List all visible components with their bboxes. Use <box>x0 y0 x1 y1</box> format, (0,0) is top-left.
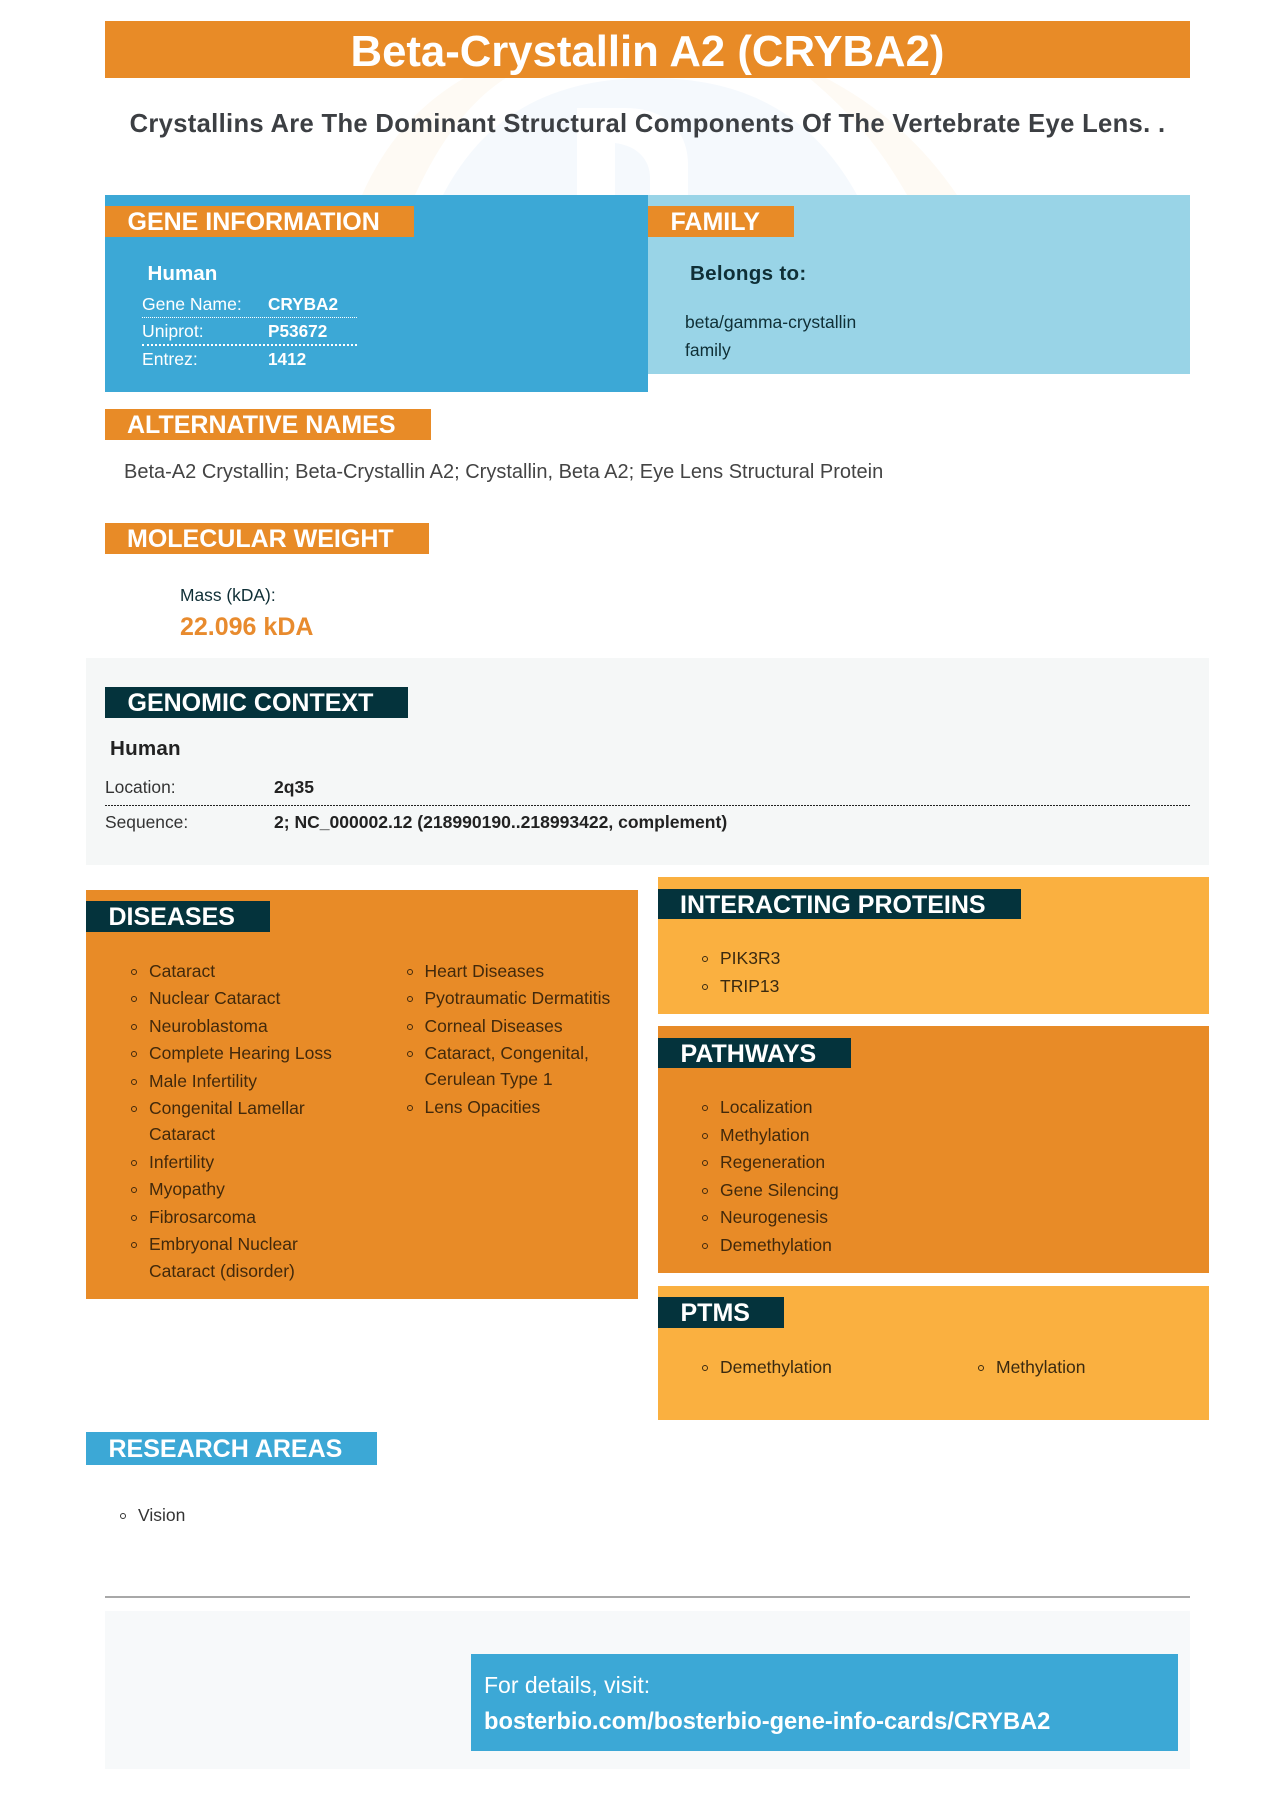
heading: genomic context: GENOMIC CONTEXT <box>128 689 373 717</box>
heading: pathways <box>658 1038 851 1068</box>
diseases list column 1: Male Infertility <box>149 1071 257 1091</box>
family name: beta/gamma-crystallin <box>685 312 856 332</box>
title bar: Beta-Crystallin A2 (CRYBA2) <box>351 27 944 76</box>
diseases list column 1: Embryonal Nuclear <box>149 1234 298 1254</box>
heading: ptms <box>658 1297 784 1328</box>
location and sequence table <box>105 777 1190 832</box>
pathways list: Localization <box>720 1097 812 1117</box>
label: belongs to: Belongs to: <box>690 262 807 285</box>
watermark logo <box>362 78 956 195</box>
diseases list column 2: Corneal Diseases <box>424 1016 563 1036</box>
gene fields table: Gene Name: <box>142 294 242 314</box>
heading: interacting proteins: INTERACTING PROTEINS <box>680 891 986 919</box>
diseases list column 2 <box>407 961 610 1117</box>
gene fields table <box>142 294 357 369</box>
pathways list: Neurogenesis <box>720 1207 828 1227</box>
label: human: Human <box>110 737 181 760</box>
panel: footer <box>105 1611 1190 1769</box>
diseases list column 1: Complete Hearing Loss <box>149 1043 332 1063</box>
diseases list column 1: Congenital Lamellar <box>149 1098 305 1118</box>
diseases list column 2: Cerulean Type 1 <box>424 1069 553 1089</box>
callout: details link <box>471 1654 1178 1751</box>
diseases list column 2: Lens Opacities <box>424 1097 540 1117</box>
diseases list column 1: Cataract <box>149 1124 215 1144</box>
diseases list column 1: Cataract (disorder) <box>149 1261 295 1281</box>
ptms list column 1: Demethylation <box>720 1357 832 1377</box>
title bar <box>105 21 1190 78</box>
callout: details link: bosterbio.com/bosterbio-gene-info-cards/CRYBA2 <box>484 1709 1050 1735</box>
heading: ptms: PTMS <box>680 1299 750 1327</box>
interacting proteins list <box>702 948 780 996</box>
pathways list: Regeneration <box>720 1152 825 1172</box>
diseases list column 1: Cataract <box>149 961 215 981</box>
panel: pathways <box>658 1026 1209 1273</box>
label: human: Human <box>148 262 217 285</box>
pathways list: Gene Silencing <box>720 1180 839 1200</box>
ptms list column 2: Methylation <box>996 1357 1086 1377</box>
panel: genomic context <box>86 658 1209 865</box>
heading: research areas: RESEARCH AREAS <box>108 1435 342 1463</box>
mass label: Mass (kDA): <box>180 585 276 605</box>
diseases list column 1: Nuclear Cataract <box>149 988 280 1008</box>
subtitle: Crystallins Are The Dominant Structural Components Of The Vertebrate Eye Lens. . <box>130 110 1165 138</box>
family name <box>685 312 856 360</box>
panel: family <box>648 195 1190 374</box>
diseases list column 1: Infertility <box>149 1152 214 1172</box>
diseases list column 2: Heart Diseases <box>424 961 544 981</box>
panel: ptms <box>658 1286 1209 1420</box>
pathways list: Methylation <box>720 1125 810 1145</box>
diseases list column 1: Fibrosarcoma <box>149 1207 256 1227</box>
gene fields table: Entrez: <box>142 349 198 369</box>
diseases list column 1 <box>131 961 332 1281</box>
diseases list column 2: Pyotraumatic Dermatitis <box>424 988 610 1008</box>
heading: family <box>648 206 794 237</box>
pathways list <box>702 1097 839 1255</box>
alternative names text: Beta-A2 Crystallin; Beta-Crystallin A2; Crystallin, Beta A2; Eye Lens Structural Protein <box>124 461 883 483</box>
gene fields table: 1412 <box>268 349 306 369</box>
interacting proteins list: TRIP13 <box>720 976 779 996</box>
heading: family: FAMILY <box>670 208 760 236</box>
panel: gene information <box>105 195 648 392</box>
callout: details link: For details, visit: <box>484 1672 650 1698</box>
research areas list: Vision <box>138 1505 185 1525</box>
location and sequence table: Sequence: <box>105 812 188 832</box>
gene fields table: P53672 <box>268 321 327 341</box>
location and sequence table: 2; NC_000002.12 (218990190..218993422, complement) <box>274 812 727 832</box>
family name: family <box>685 340 731 360</box>
interacting proteins list: PIK3R3 <box>720 948 780 968</box>
gene fields table: CRYBA2 <box>268 294 338 314</box>
diseases list column 1: Neuroblastoma <box>149 1016 268 1036</box>
heading: research areas <box>86 1432 377 1465</box>
gene fields table: Uniprot: <box>142 321 204 341</box>
heading: pathways: PATHWAYS <box>680 1040 816 1068</box>
panel: interacting proteins <box>658 877 1209 1014</box>
location and sequence table: Location: <box>105 777 176 797</box>
heading: diseases <box>86 901 270 932</box>
heading: alternative names: ALTERNATIVE NAMES <box>127 411 396 439</box>
pathways list: Demethylation <box>720 1235 832 1255</box>
heading: diseases: DISEASES <box>108 903 235 931</box>
mass value: 22.096 kDA <box>180 613 313 641</box>
diseases list column 1: Myopathy <box>149 1179 225 1199</box>
heading: gene information: GENE INFORMATION <box>128 208 380 236</box>
diseases list column 2: Cataract, Congenital, <box>424 1043 589 1063</box>
heading: molecular weight: MOLECULAR WEIGHT <box>127 525 394 553</box>
panel: diseases <box>86 890 638 1299</box>
location and sequence table: 2q35 <box>274 777 314 797</box>
